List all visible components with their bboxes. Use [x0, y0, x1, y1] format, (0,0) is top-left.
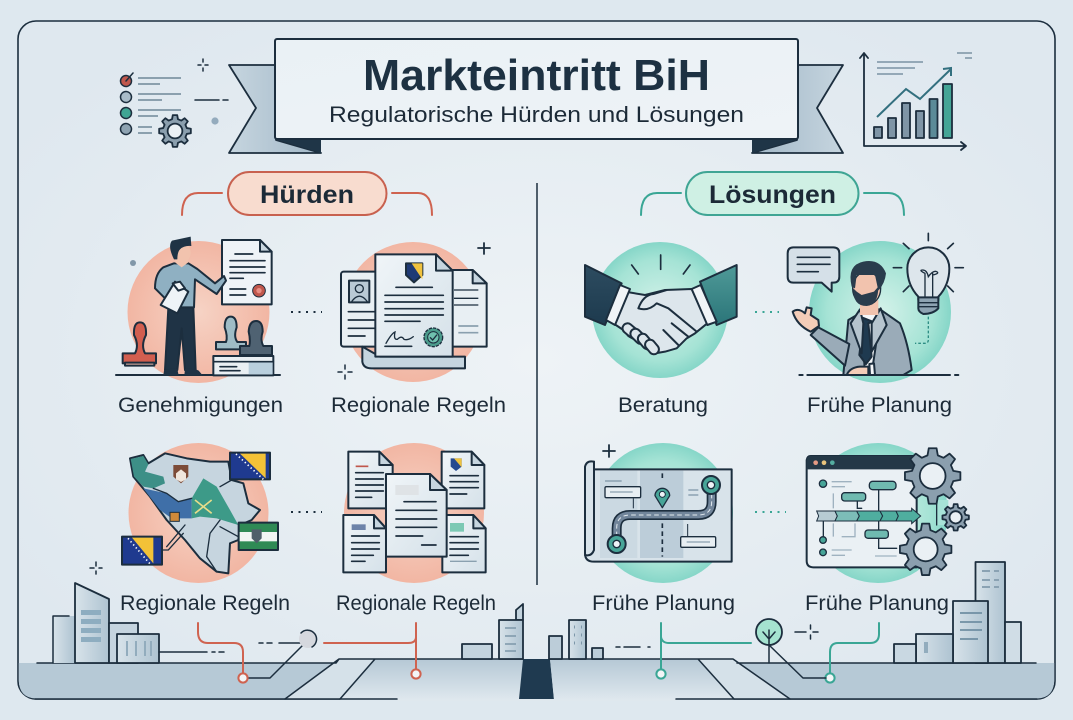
label: Frühe Planung roadmap: Frühe Planung — [592, 592, 735, 615]
panel: Frühe Planung gantt — [807, 443, 969, 583]
icon: gantt window with gears — [807, 448, 969, 575]
icon: person with stamps and permit — [116, 237, 280, 375]
panel: Beratung — [585, 242, 737, 378]
icon: map of Bosnia with flags — [122, 453, 278, 573]
dotted link 4 — [755, 511, 786, 513]
label: Frühe Planung gantt: Frühe Planung — [805, 592, 949, 615]
icon: bar chart with trend arrow — [860, 53, 972, 150]
ground: road bands — [19, 659, 1054, 701]
icon: handshake — [585, 255, 737, 356]
panel: Regionale Regeln files — [343, 443, 486, 583]
label: Genehmigungen: Genehmigungen — [118, 394, 283, 417]
heading: Lösungen — [641, 172, 904, 215]
tree icon — [756, 619, 826, 678]
ribbon left — [229, 65, 321, 153]
title: Markteintritt BiH — [363, 51, 710, 100]
ribbon fold left — [275, 139, 321, 153]
label: Regionale Regeln files: Regionale Regeln — [336, 592, 496, 615]
heading: Hürden — [182, 172, 432, 215]
sparkle lower left — [90, 562, 102, 574]
right skyline buildings — [894, 562, 1021, 663]
label: Beratung: Beratung — [618, 394, 708, 417]
panel: Frühe Planung consultant — [788, 233, 963, 383]
dotted link 2 — [291, 511, 322, 513]
sparkle and dashes top left — [195, 59, 228, 125]
left skyline buildings — [53, 583, 224, 663]
center divider — [536, 183, 538, 585]
icon: consultant with bulb and speech bubble — [788, 233, 963, 375]
label: Regionale Regeln map: Regionale Regeln — [120, 592, 290, 615]
label: Regionale Regeln top: Regionale Regeln — [331, 394, 506, 417]
ribbon right — [752, 65, 843, 153]
label: Frühe Planung consultant: Frühe Planung — [807, 394, 952, 417]
subtitle: Regulatorische Hürden und Lösungen — [329, 102, 744, 127]
heading: Lösungen: Lösungen — [709, 181, 836, 209]
panel: Regionale Regeln map — [122, 443, 278, 583]
icon: stack of regional documents — [343, 452, 486, 572]
panel: Regionale Regeln documents — [338, 242, 490, 382]
dotted link 3 — [755, 311, 779, 313]
icon: checklist with gear — [120, 73, 191, 147]
title banner — [275, 39, 798, 139]
icon: roadmap — [585, 461, 732, 562]
red connector lines — [198, 623, 421, 683]
panel: Frühe Planung roadmap — [585, 443, 733, 583]
panel: Genehmigungen — [116, 237, 280, 383]
dotted link 1 — [291, 311, 322, 313]
icon: official documents with shield — [341, 254, 487, 368]
ribbon fold right — [752, 139, 798, 153]
cityscape ground and skyline — [19, 562, 1054, 701]
teal connector lines — [656, 623, 879, 683]
heading: Hürden: Hürden — [260, 181, 354, 209]
center skyline buildings — [462, 604, 650, 659]
